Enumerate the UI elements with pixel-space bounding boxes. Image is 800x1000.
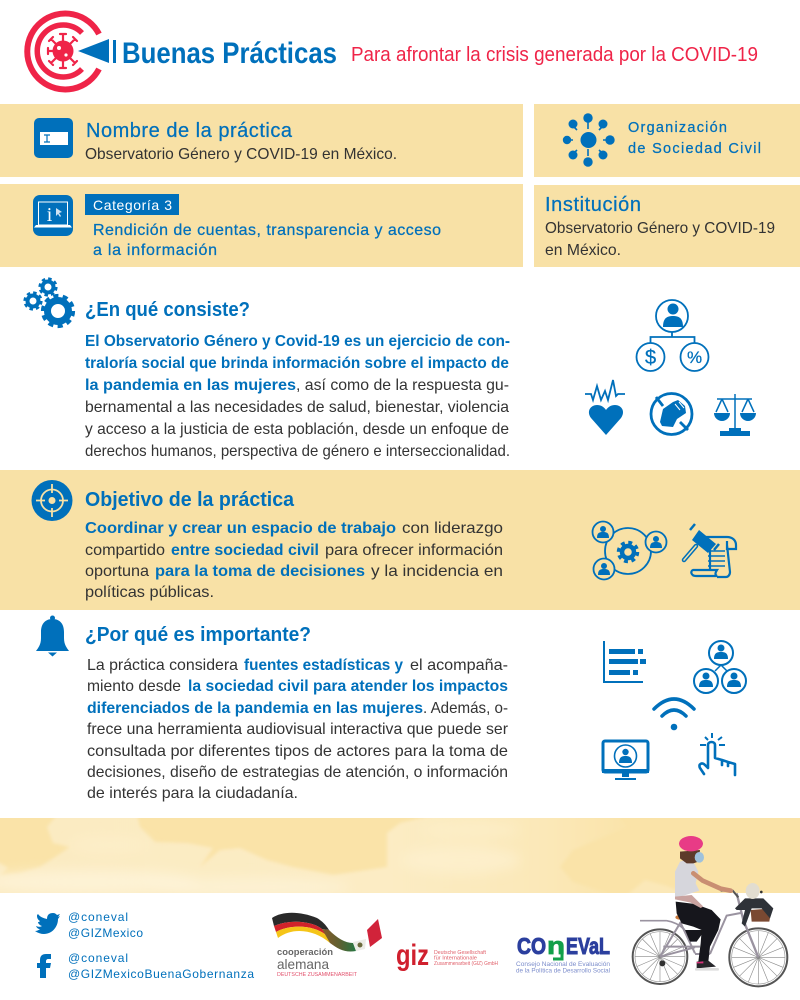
icon: heart with pulse <box>585 380 625 435</box>
logo: cooperación alemana: DEUTSCHE ZUSAMMENARBEIT <box>277 972 357 978</box>
text: institución value <box>545 220 775 259</box>
icon: wifi <box>654 699 694 730</box>
panel: institución <box>534 185 800 267</box>
text block: en qué consiste: traloría social que brinda información sobre el impacto de <box>85 355 509 372</box>
logo: giz: Zusammenarbeit (GIZ) GmbH <box>434 961 498 967</box>
text: categoría name: Rendición de cuentas, transparencia y acceso <box>93 222 441 239</box>
text: organización de sociedad civil <box>628 120 761 157</box>
text block: por qué es importante: consultada por diferentes tipos de actores para la toma de <box>87 743 508 760</box>
heading: nombre: Nombre de la práctica <box>86 120 293 142</box>
rider arm <box>693 873 731 891</box>
text block: objetivo: para la toma de decisiones <box>155 563 365 580</box>
text block: objetivo: entre sociedad civil <box>171 542 319 559</box>
text block: por qué es importante: fuentes estadísticas y <box>244 657 403 674</box>
text: institución value: en México. <box>545 242 621 259</box>
label: categoría 3: Categoría 3 <box>93 197 172 213</box>
panel: organización <box>534 104 800 177</box>
icon: people around a gear <box>592 522 666 580</box>
text block: en qué consiste <box>85 333 510 460</box>
text: institución value: Observatorio Género y COVID-19 <box>545 220 775 237</box>
text block: por qué es importante: decisiones, diseño de estrategias de atención, o información <box>87 764 508 781</box>
logo: cooperación alemana: cooperación <box>277 947 333 958</box>
text block: por qué es importante: La práctica considera <box>87 657 238 674</box>
logo: coneval: n <box>547 933 565 960</box>
text block: objetivo: y la incidencia en <box>371 563 503 580</box>
heading: objetivo: Objetivo de la práctica <box>85 489 295 511</box>
text block: objetivo: compartido <box>85 542 165 559</box>
logo: coneval: CO <box>517 933 546 959</box>
text block: por qué es importante: de interés para la ciudadanía. <box>87 785 298 802</box>
text block: por qué es importante: el acompaña- <box>410 657 508 674</box>
icon: person with money and percent: $ <box>645 347 656 369</box>
icon: monitor with person <box>602 741 649 780</box>
panel: nombre de la práctica <box>0 104 523 177</box>
text block: en qué consiste: y acceso a la justicia de esta población, desde un enfoque de <box>85 421 509 438</box>
rider head <box>680 850 700 863</box>
bicycle wheels <box>633 928 787 986</box>
logo: coneval: Consejo Nacional de Evaluación <box>516 962 610 968</box>
heading: institución: Institución <box>545 194 641 216</box>
icon: bar list <box>603 641 646 683</box>
text block: objetivo: políticas públicas. <box>85 584 214 601</box>
text block: por qué es importante: . Además, o- <box>423 700 508 717</box>
text block: objetivo: Coordinar y crear un espacio de trabajo <box>85 520 396 537</box>
icon: facebook <box>37 954 51 978</box>
logo: giz: Deutsche Gesellschaft <box>434 950 487 956</box>
icon: network hub <box>563 113 615 167</box>
logo: cooperación alemana: alemana <box>277 956 329 972</box>
heading: en qué consiste: ¿En qué consiste? <box>85 299 250 321</box>
icon: gears <box>25 279 73 326</box>
icon: laptop info: i <box>47 204 53 226</box>
text block: por qué es importante <box>87 657 509 802</box>
logo: giz: für Internationale <box>434 956 477 962</box>
text block: en qué consiste: derechos humanos, perspectiva de género e interseccionalidad. <box>85 443 510 460</box>
icon: no violence <box>651 394 692 434</box>
icon: text field <box>34 118 73 158</box>
text: organización de sociedad civil: de Sociedad Civil <box>628 141 761 157</box>
rider legs <box>685 930 705 942</box>
icon: bell <box>36 616 69 656</box>
text: facebook handles: @GIZMexicoBuenaGobernanza <box>68 967 254 981</box>
logo: cooperación alemana <box>272 913 382 978</box>
text block: objetivo: para ofrecer información <box>325 542 503 559</box>
subtitle: Para afrontar la crisis generada por la COVID-19 <box>351 44 758 66</box>
text block: por qué es importante: frece una herramienta audiovisual interactiva que puede ser <box>87 721 509 738</box>
icon: target <box>32 480 72 521</box>
icon: laptop info <box>33 195 73 236</box>
logo: giz <box>396 939 498 972</box>
title: Buenas Prácticas <box>122 37 337 70</box>
text block: por qué es importante: la sociedad civil para atender los impactos <box>188 678 508 695</box>
icon: gavel and scroll <box>684 524 736 577</box>
icon: person with money and percent <box>636 300 708 371</box>
text block: objetivo: con liderazgo <box>402 520 503 537</box>
logo: coneval: de la Política de Desarrollo Social <box>516 968 610 974</box>
text block: por qué es importante: miento desde <box>87 678 181 695</box>
text: twitter handles <box>68 910 143 940</box>
label: categoría 3 <box>85 194 179 215</box>
panel: objetivo de la práctica <box>0 470 800 610</box>
icon: pointing hand <box>699 733 735 775</box>
text block: objetivo: oportuna <box>85 563 149 580</box>
logo: giz: giz <box>396 939 429 972</box>
text: nombre value: Observatorio Género y COVID-19 en México. <box>85 146 397 163</box>
text block: en qué consiste: , así como de la respuesta gu- <box>296 377 509 394</box>
text: categoría name <box>93 222 441 259</box>
text block: en qué consiste: bernamental a las necesidades de salud, bienestar, violencia <box>85 399 509 416</box>
icon: people network <box>694 641 746 693</box>
text: facebook handles <box>68 951 254 981</box>
basket and dog <box>751 908 772 922</box>
icon: scales of justice <box>714 394 756 436</box>
icon: twitter <box>35 913 60 934</box>
text block: objetivo <box>85 520 503 601</box>
heading: por qué es importante: ¿Por qué es importante? <box>85 624 311 646</box>
rider shirt <box>675 858 699 898</box>
icon: person with money and percent: % <box>687 348 702 367</box>
photo: woman on bicycle with dog <box>633 836 787 986</box>
logo: coneval <box>516 933 610 974</box>
text: twitter handles: @coneval <box>68 910 128 924</box>
text: organización de sociedad civil: Organización <box>628 120 727 136</box>
text: categoría name: a la información <box>93 242 217 259</box>
panel: categoría <box>0 184 523 267</box>
text block: por qué es importante: diferenciados de la pandemia en las mujeres <box>87 700 423 717</box>
text: twitter handles: @GIZMexico <box>68 926 143 940</box>
text: facebook handles: @coneval <box>68 951 128 965</box>
photo band: clouds <box>0 815 800 896</box>
logo: coneval: EVaL <box>566 933 610 959</box>
text block: en qué consiste: El Observatorio Género y Covid-19 es un ejercicio de con- <box>85 333 510 350</box>
text block: en qué consiste: la pandemia en las mujeres <box>85 377 296 394</box>
bicycle frame <box>640 891 758 957</box>
logo: virus target with megaphone <box>27 13 116 89</box>
